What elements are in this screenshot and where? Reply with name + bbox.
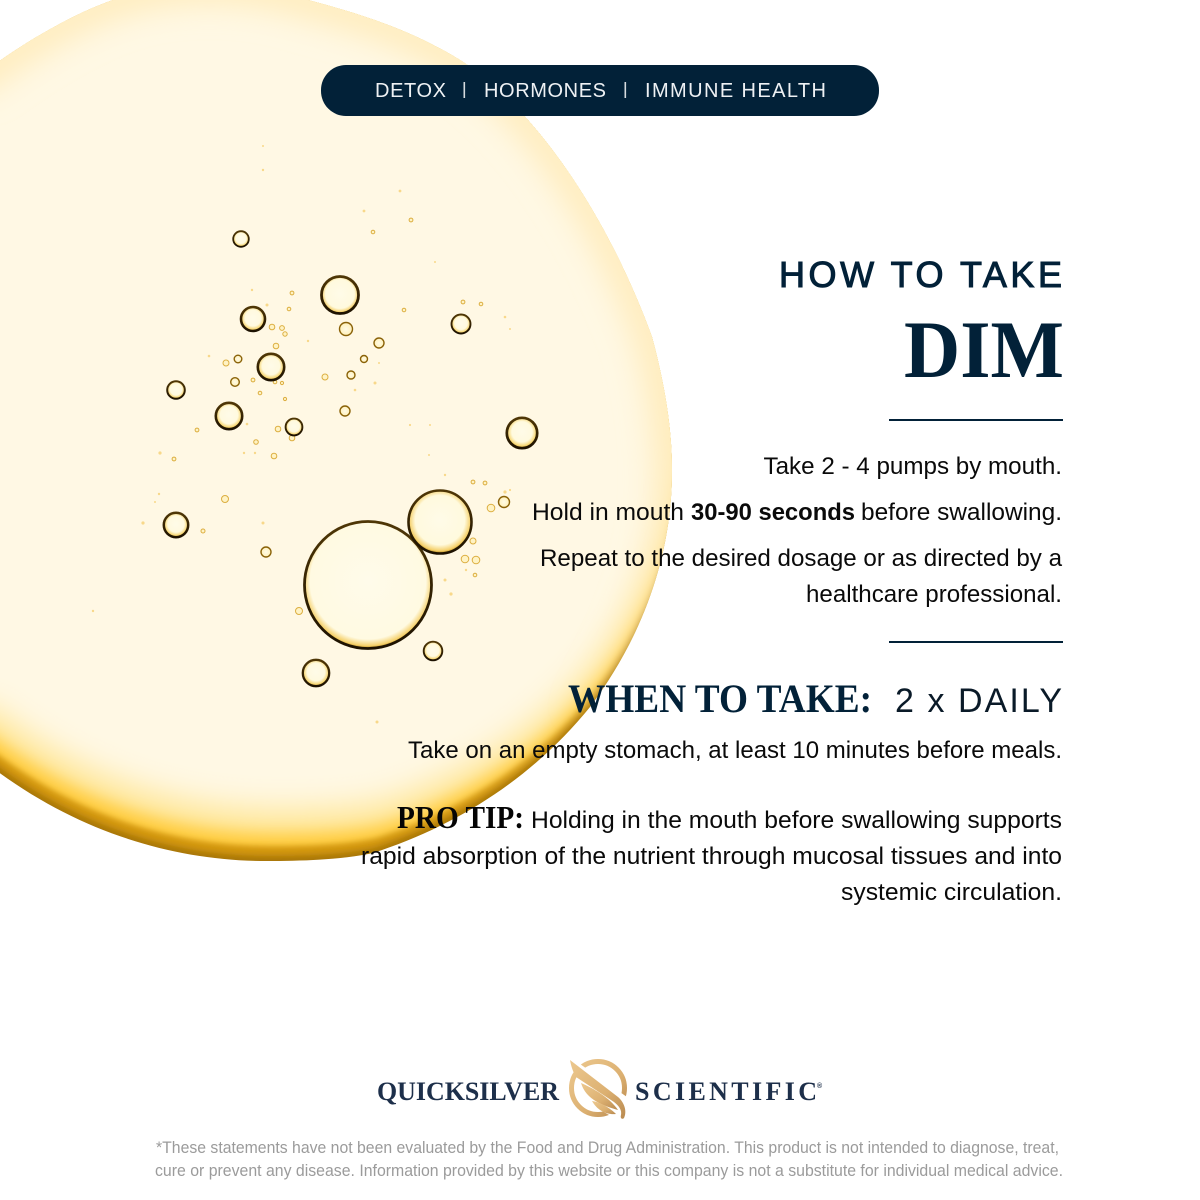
top pill banner: IMMUNE HEALTH: [645, 80, 826, 102]
pro tip: rapid absorption of the nutrient through mucosal tissues and into: [361, 843, 1062, 870]
disclaimer: [155, 1139, 1063, 1180]
dosage instructions: Take 2 - 4 pumps by mouth.: [764, 453, 1062, 480]
top pill banner: DETOX: [375, 80, 446, 102]
when to take heading: 2 x DAILY: [895, 682, 1062, 720]
divider: [889, 641, 1063, 643]
dosage instructions: before swallowing.: [861, 499, 1062, 526]
faint oil specks: [92, 145, 511, 724]
pro tip: [361, 799, 1062, 906]
dosage instructions: 30-90 seconds: [691, 499, 855, 526]
small bubbles: [172, 218, 510, 614]
large bubble: [304, 522, 432, 648]
top pill banner: [321, 65, 879, 116]
logo: ®: [817, 1082, 823, 1090]
disclaimer: cure or prevent any disease. Information provided by this website or this company is not a substitute for individual medical advice.: [155, 1162, 1063, 1180]
second large bubble: [408, 490, 472, 554]
medium bubbles: [164, 231, 537, 686]
pro tip: Holding in the mouth before swallowing supports: [531, 807, 1062, 834]
icon: gold feather ring: [566, 1059, 630, 1119]
when to take text: Take on an empty stomach, at least 10 minutes before meals.: [408, 737, 1062, 764]
dosage instructions: Hold in mouth: [532, 499, 684, 526]
dosage instructions: Repeat to the desired dosage or as directed by a: [540, 545, 1063, 572]
logo: QUICKSILVER: [377, 1077, 559, 1106]
top pill banner: HORMONES: [484, 80, 606, 102]
disclaimer: *These statements have not been evaluated by the Food and Drug Administration. This product is not intended to diagnose, treat,: [156, 1139, 1059, 1157]
when to take heading: [568, 676, 1062, 721]
dosage instructions: [532, 453, 1063, 608]
dosage instructions: healthcare professional.: [806, 581, 1062, 608]
heading: DIM: DIM: [904, 304, 1064, 395]
pro tip: PRO TIP:: [397, 799, 524, 835]
heading: how to take: HOW TO TAKE: [779, 254, 1062, 295]
when to take heading: WHEN TO TAKE:: [568, 676, 872, 721]
oil drop background: [0, 0, 700, 880]
logo: SCIENTIFIC: [635, 1077, 817, 1106]
divider: [889, 419, 1063, 421]
pro tip: systemic circulation.: [841, 879, 1062, 906]
logo: [377, 1059, 823, 1119]
